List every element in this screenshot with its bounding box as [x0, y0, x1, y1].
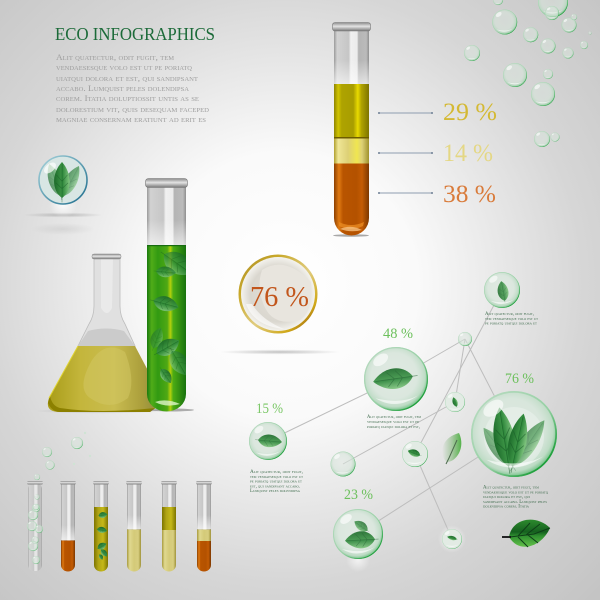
- tube value callouts: [378, 99, 497, 208]
- intro text block: magniae consernam eratiunt ad erit es: [56, 114, 206, 124]
- node: 76%: [471, 371, 557, 510]
- icon: large green leaf: [502, 520, 550, 547]
- tube 4 pale: [126, 481, 142, 572]
- node: 76%: vendaesesque volo est ut pe poriatq: [483, 490, 549, 496]
- network connector lines: [268, 290, 514, 539]
- node: 48%: vendaesesque volo est ut pe: [367, 420, 419, 425]
- percentage sphere 76%: 76 %: [250, 282, 309, 313]
- node: 48%: Alit quatectur, odit fugit, tem: [367, 415, 421, 420]
- intro text block: Alit quatectur, odit fugit, tem: [56, 52, 175, 62]
- intro text block: uiatqui dolora et est, qui sandipsant: [56, 73, 198, 83]
- rising bubbles left: [34, 432, 91, 480]
- flask: [34, 254, 166, 414]
- tube 2 orange: [60, 481, 76, 572]
- node: 76%: sandipsant accabo. Lumquist peles: [483, 500, 547, 505]
- node: 15%: Lumquist peles dolendipsa: [250, 489, 301, 494]
- node: 23%: 23 %: [344, 487, 373, 503]
- node: 15%: est, qui sandipsant accabo.: [250, 484, 300, 490]
- intro text block: vendaesesque volo est ut pe poriatq: [56, 62, 193, 72]
- node: 15%: tem vendaesesque volo est ut: [250, 475, 303, 480]
- node: 76%: Alit quatectur, odit fugit, tem: [483, 486, 539, 490]
- node: 23%: [333, 487, 383, 572]
- tube value callouts: 29 %: [443, 99, 497, 126]
- icon: silver green leaf: [442, 433, 461, 464]
- tube value callouts: 38 %: [443, 181, 496, 208]
- tube value callouts: 14 %: [443, 140, 493, 167]
- node: top leaf: Alit quatectur, odit fugit,: [485, 312, 534, 317]
- green test tube with leaves: [146, 178, 198, 412]
- node: 76%: dolendipsa corem. Itatia: [483, 504, 530, 510]
- percentage sphere 76%: [220, 254, 340, 354]
- tube 3 leaves: [93, 481, 109, 572]
- intro text block: accabo. Lumquist peles dolendipsa: [56, 83, 190, 93]
- node: top leaf: [484, 272, 538, 326]
- floating leaves: [150, 252, 186, 383]
- intro text block: corem. Itatia doluptiossit untis as se: [56, 93, 199, 103]
- mini test tubes: [27, 481, 212, 572]
- node: 15%: Alit quatectur, odit fugit,: [250, 470, 303, 475]
- icon: leaf sphere: [23, 156, 103, 235]
- node: top leaf: tem vendaesesque volo est ut: [485, 317, 538, 322]
- node: 15%: pe poriatq uiatqui dolora et: [250, 480, 302, 484]
- tube 1 bubbles: [27, 481, 43, 571]
- node: 48%: [364, 326, 428, 430]
- node: 48%: poriatq uiatqui dolora et est,: [367, 425, 420, 430]
- node: 15%: 15 %: [256, 401, 283, 417]
- node: top leaf: pe poriatq uiatqui dolora et: [485, 322, 537, 326]
- large test tube: [332, 22, 370, 237]
- node: 76%: 76 %: [505, 371, 534, 387]
- floating bubbles top right: [464, 0, 592, 147]
- node: 48%: 48 %: [383, 326, 413, 342]
- title: ECO INFOGRAPHICS: [55, 24, 215, 44]
- intro text block: dolorestium vit, quis desequam faceped: [56, 104, 210, 114]
- node: junction bubbles: [330, 332, 472, 553]
- node: 15%: [249, 401, 303, 494]
- tube 6 pale and orange: [196, 481, 212, 572]
- intro text block: [56, 52, 210, 124]
- node: 76%: uiatqui dolora et est, qui: [483, 495, 530, 500]
- tube 5 yellow and pale: [161, 481, 177, 572]
